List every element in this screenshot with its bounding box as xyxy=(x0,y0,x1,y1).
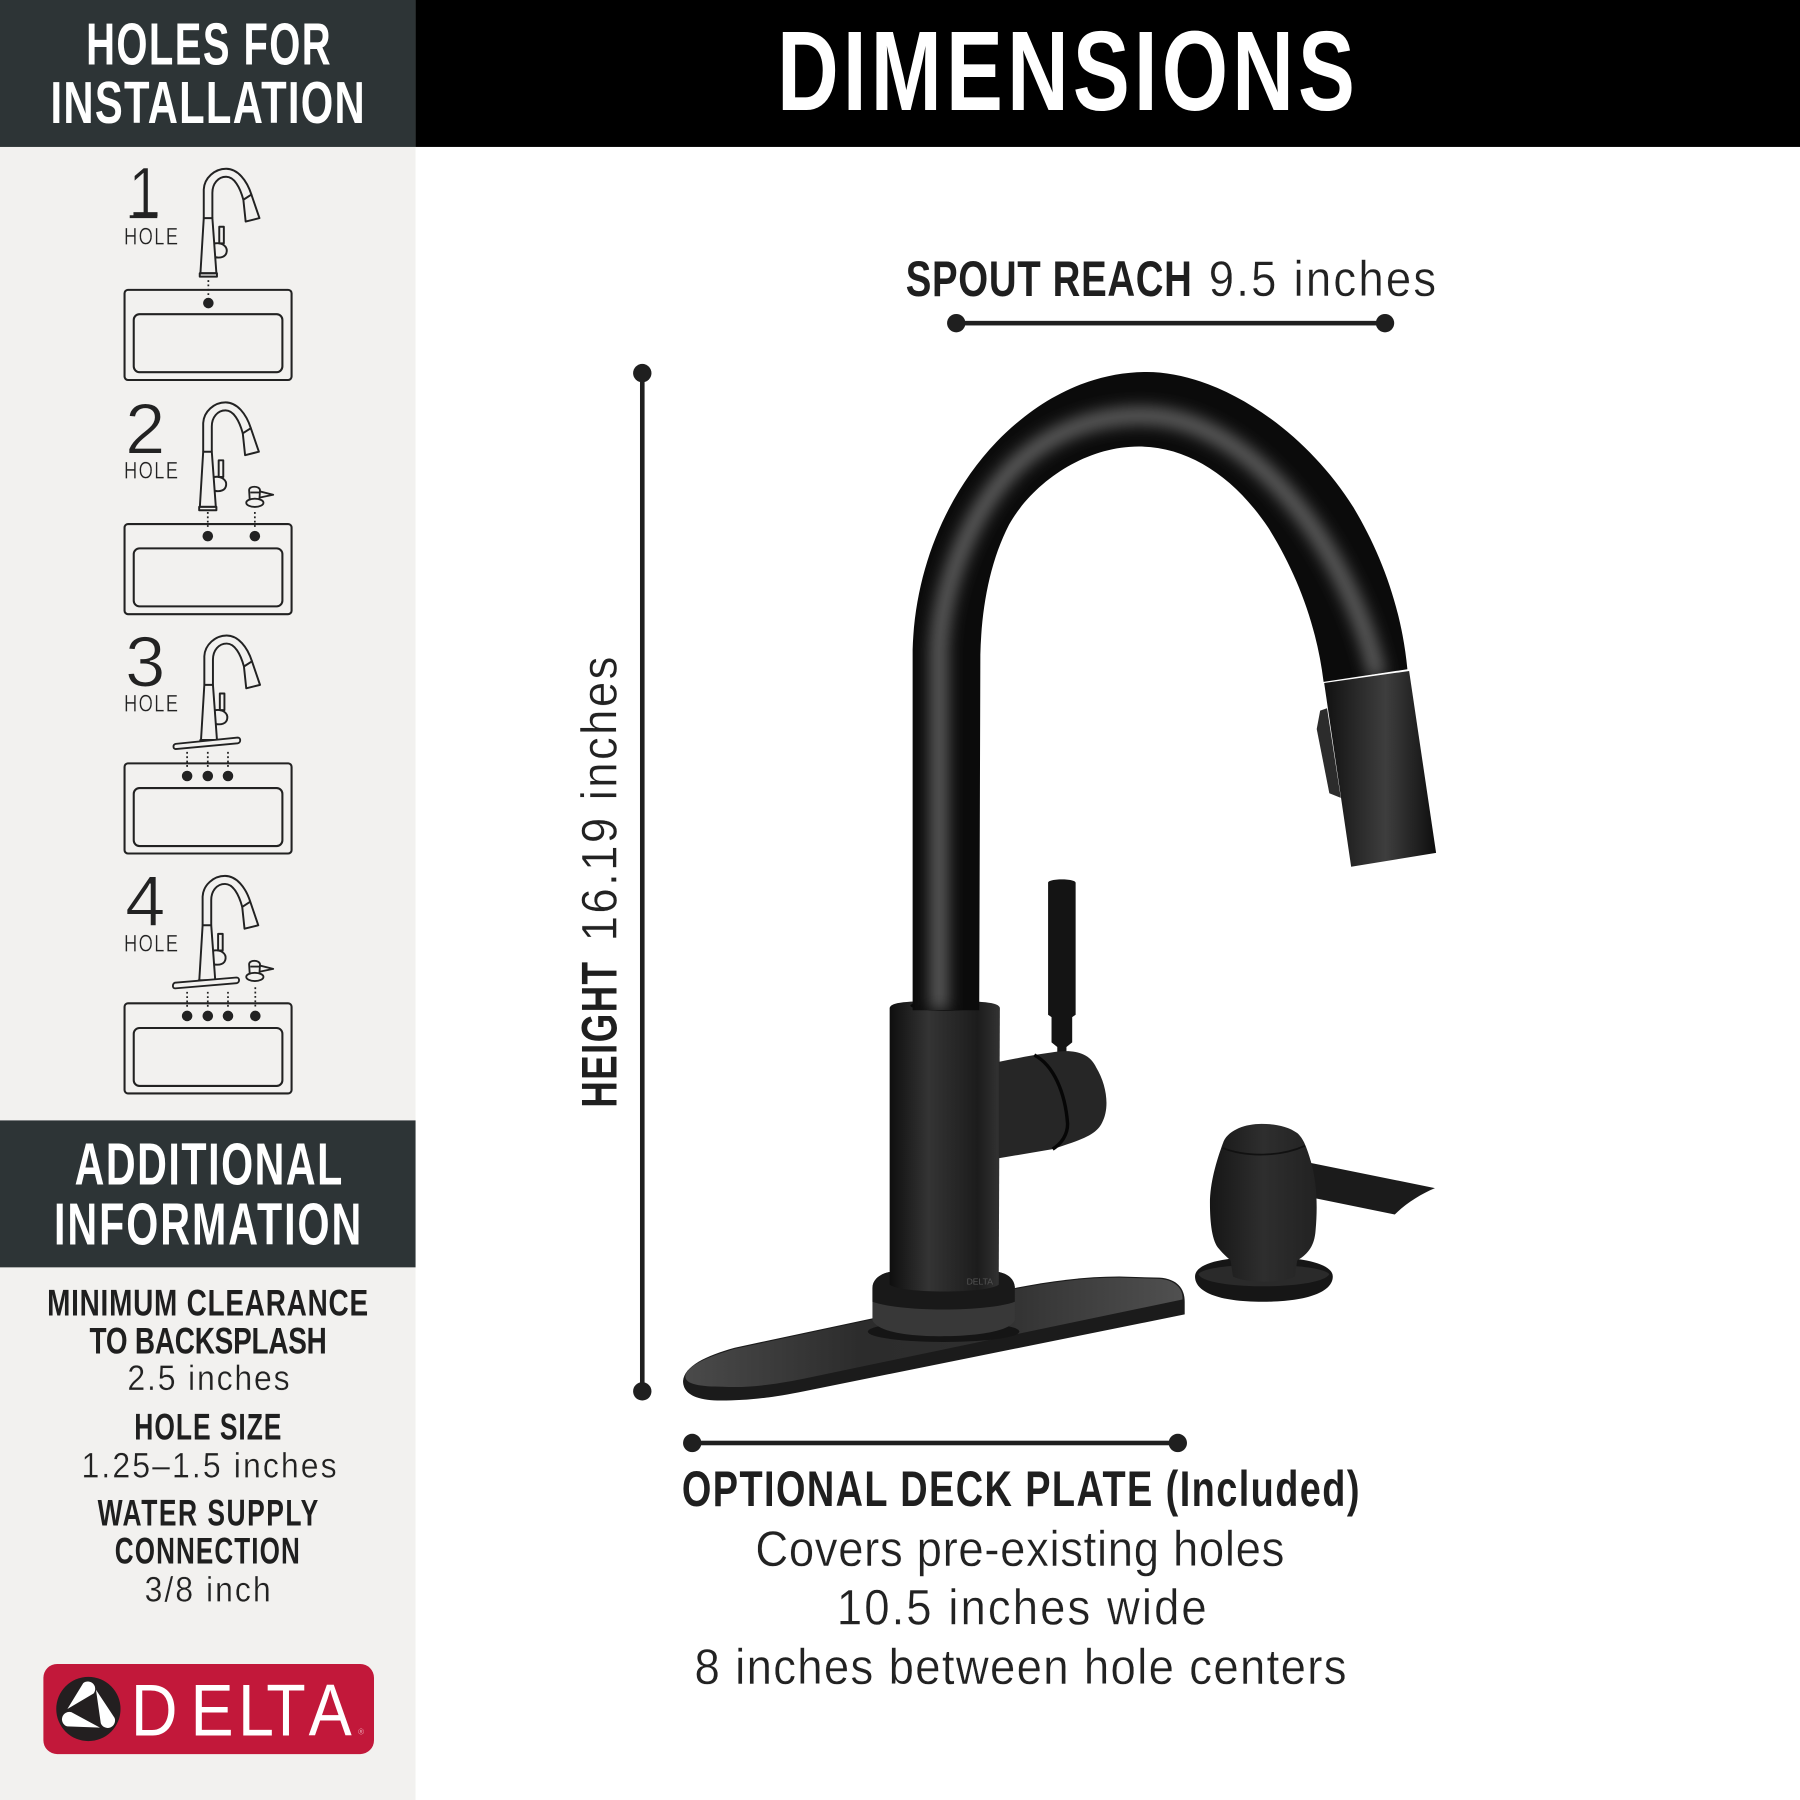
additional information text xyxy=(47,1282,368,1610)
additional information text: 2.5 inches xyxy=(127,1359,290,1399)
option: 2 hole xyxy=(124,390,292,614)
dimension: optional deck plate: 8 inches between hole centers xyxy=(695,1640,1346,1696)
option: 1 hole xyxy=(124,154,292,380)
soap dispenser xyxy=(1195,1124,1435,1302)
escutcheon base xyxy=(872,1272,1015,1336)
icon: faucet xyxy=(199,876,258,984)
icon: sink with holes xyxy=(125,763,292,854)
dimension: optional deck plate: Covers pre-existing holes xyxy=(755,1522,1284,1577)
additional information text: 3/8 inch xyxy=(145,1570,271,1610)
icon: deck plate xyxy=(173,977,239,988)
registered mark: ® xyxy=(358,1728,364,1737)
icon: sink with holes xyxy=(125,524,292,614)
main body xyxy=(890,1000,1000,1291)
icon: soap dispenser xyxy=(246,487,273,507)
icon: faucet xyxy=(200,636,260,743)
sidebar background xyxy=(0,0,416,1800)
number 4: 4 xyxy=(125,862,165,941)
option: 4 hole xyxy=(124,862,292,1093)
measure line xyxy=(683,1434,1187,1452)
header: dimensions xyxy=(416,0,1800,147)
number 1: 1 xyxy=(129,154,161,233)
lever handle xyxy=(999,879,1106,1158)
additional information text: WATER SUPPLY xyxy=(98,1492,318,1534)
additional information text: 1.25–1.5 inches xyxy=(82,1446,337,1486)
escutcheon shadow on plate xyxy=(868,1321,1019,1342)
label hole: HOLE xyxy=(124,457,178,484)
icon: sink with hole xyxy=(125,290,292,380)
logo: delta xyxy=(43,1664,374,1754)
header: holes for installation: INSTALLATION xyxy=(51,68,365,136)
measure line xyxy=(633,364,651,1401)
icon: dotted guides xyxy=(187,987,255,1008)
header: holes for installation xyxy=(0,0,416,147)
dimension: height: 16.19 inches xyxy=(572,657,628,941)
icon: sink with holes xyxy=(125,1003,292,1093)
icon: dotted guides xyxy=(187,752,228,767)
dimension: optional deck plate: OPTIONAL DECK PLATE (Included) xyxy=(682,1462,1359,1517)
number 2: 2 xyxy=(125,390,165,469)
additional information text: MINIMUM CLEARANCE xyxy=(47,1282,368,1323)
pull-down spray head xyxy=(1317,671,1436,867)
product photo: faucet xyxy=(683,372,1436,1401)
icon: faucet xyxy=(200,169,259,277)
measure line xyxy=(947,314,1394,332)
header: dimensions: DIMENSIONS xyxy=(777,8,1355,135)
label hole: HOLE xyxy=(124,690,178,717)
dimension: optional deck plate xyxy=(682,1434,1359,1696)
header: additional information: INFORMATION xyxy=(54,1191,361,1257)
option: 3 hole xyxy=(124,623,292,854)
dimension: spout reach: 9.5 inches xyxy=(1209,252,1436,308)
spout arc xyxy=(913,372,1407,1010)
wordmark: DELTA xyxy=(131,1669,353,1752)
additional information text: CONNECTION xyxy=(115,1530,300,1572)
header: additional information: ADDITIONAL xyxy=(75,1131,342,1197)
header: additional information xyxy=(0,1120,416,1267)
dimension: optional deck plate: 10.5 inches wide xyxy=(837,1580,1207,1636)
number 3: 3 xyxy=(125,623,165,702)
label hole: HOLE xyxy=(124,223,178,250)
dimension: height xyxy=(572,364,651,1401)
icon: deck plate xyxy=(173,738,240,749)
deck plate xyxy=(683,1277,1185,1401)
icon: dotted guide xyxy=(207,280,209,296)
icon: faucet xyxy=(199,402,259,510)
header: holes for installation: HOLES FOR xyxy=(86,10,331,77)
dimension: spout reach xyxy=(906,250,1436,332)
icon: soap dispenser xyxy=(246,961,273,981)
icon: dotted guides xyxy=(208,512,255,529)
dimension: spout reach: SPOUT REACH xyxy=(906,250,1192,307)
label hole: HOLE xyxy=(124,930,178,957)
icon: delta triangle mark xyxy=(56,1677,121,1741)
additional information text: TO BACKSPLASH xyxy=(90,1320,327,1361)
brand mark on body: DELTA xyxy=(967,1277,993,1287)
dimension: height: HEIGHT xyxy=(572,962,628,1108)
additional information text: HOLE SIZE xyxy=(134,1406,281,1448)
